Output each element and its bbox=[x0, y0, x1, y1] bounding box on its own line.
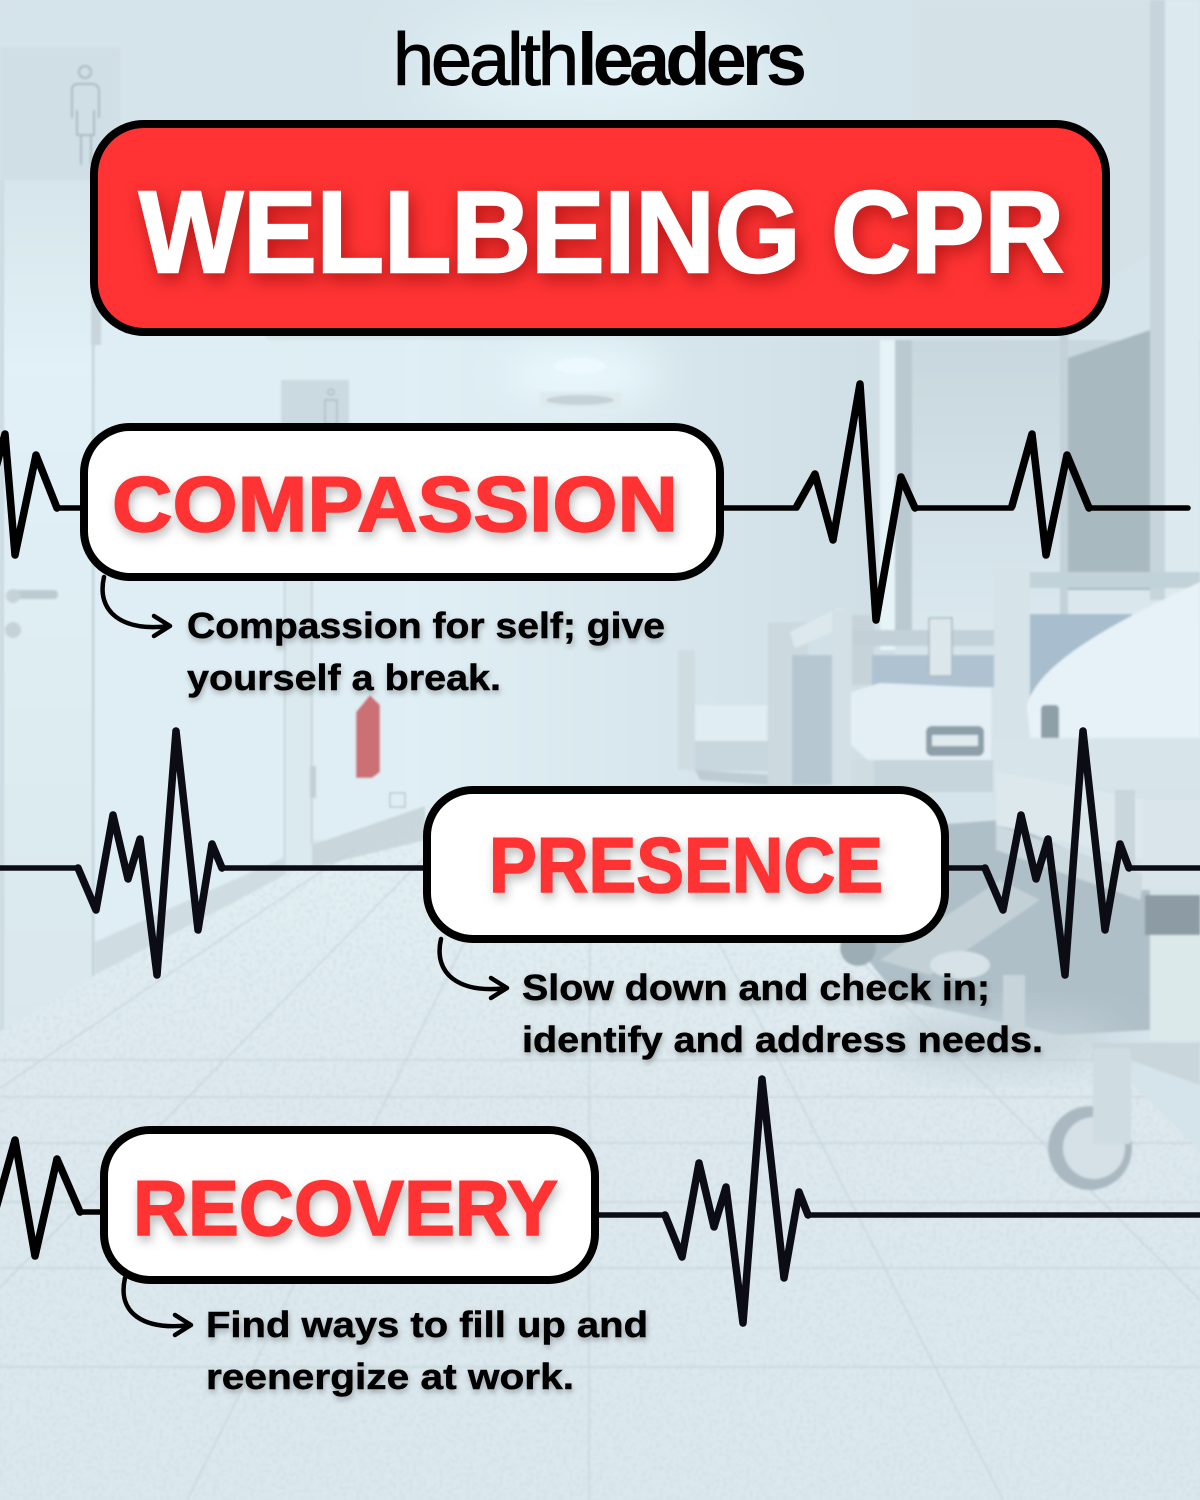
recovery description: reenergize at work. bbox=[206, 1356, 574, 1397]
presence description: Slow down and check in; bbox=[522, 967, 990, 1008]
near-left bed panel bbox=[768, 622, 808, 787]
door bracket bbox=[50, 184, 90, 240]
near bed bbox=[994, 570, 1030, 820]
floor bbox=[0, 822, 1200, 1500]
logo: healthleaders bbox=[393, 18, 807, 101]
presence pill bbox=[427, 790, 945, 939]
panel: compassion bbox=[84, 427, 720, 698]
logo: healthleaders: health bbox=[393, 18, 579, 101]
arrow: recovery bbox=[124, 1278, 191, 1335]
presence heading: PRESENCE bbox=[489, 821, 883, 909]
far bed bbox=[678, 650, 695, 770]
compassion description: yourself a break. bbox=[187, 657, 501, 698]
panel: recovery bbox=[104, 1130, 648, 1397]
restroom sign, left bbox=[0, 48, 120, 180]
compassion description: Compassion for self; give bbox=[187, 605, 665, 646]
left door bbox=[0, 180, 93, 1030]
far door bbox=[285, 580, 313, 875]
ecg line: recovery right bbox=[596, 1079, 1200, 1323]
compassion pill bbox=[84, 427, 720, 577]
recovery pill bbox=[104, 1130, 595, 1280]
logo: healthleaders: leaders bbox=[577, 18, 807, 101]
presence description: identify and address needs. bbox=[522, 1019, 1043, 1060]
compassion heading: COMPASSION bbox=[112, 460, 678, 548]
title text: WELLBEING CPR bbox=[139, 167, 1064, 297]
ecg line: presence left bbox=[0, 731, 427, 975]
back sign bbox=[281, 380, 349, 428]
base levers bbox=[880, 880, 1040, 975]
fire extinguisher bbox=[356, 695, 380, 778]
bed control plate bbox=[929, 618, 952, 676]
under-bed shadow bbox=[868, 820, 1150, 1035]
castor wheel bbox=[1092, 1043, 1200, 1085]
arrow: compassion bbox=[103, 577, 170, 636]
recovery description: Find ways to fill up and bbox=[206, 1304, 648, 1345]
ecg line: compassion right bbox=[722, 384, 1188, 620]
panel: presence bbox=[427, 790, 1043, 1060]
right wall bbox=[895, 340, 1200, 620]
title banner bbox=[94, 124, 1106, 332]
arrow: presence bbox=[440, 939, 507, 998]
ecg line: presence right bbox=[945, 731, 1200, 975]
recovery heading: RECOVERY bbox=[133, 1164, 558, 1252]
ecg line: recovery left bbox=[0, 1140, 104, 1256]
ecg line: compassion left bbox=[0, 434, 84, 555]
